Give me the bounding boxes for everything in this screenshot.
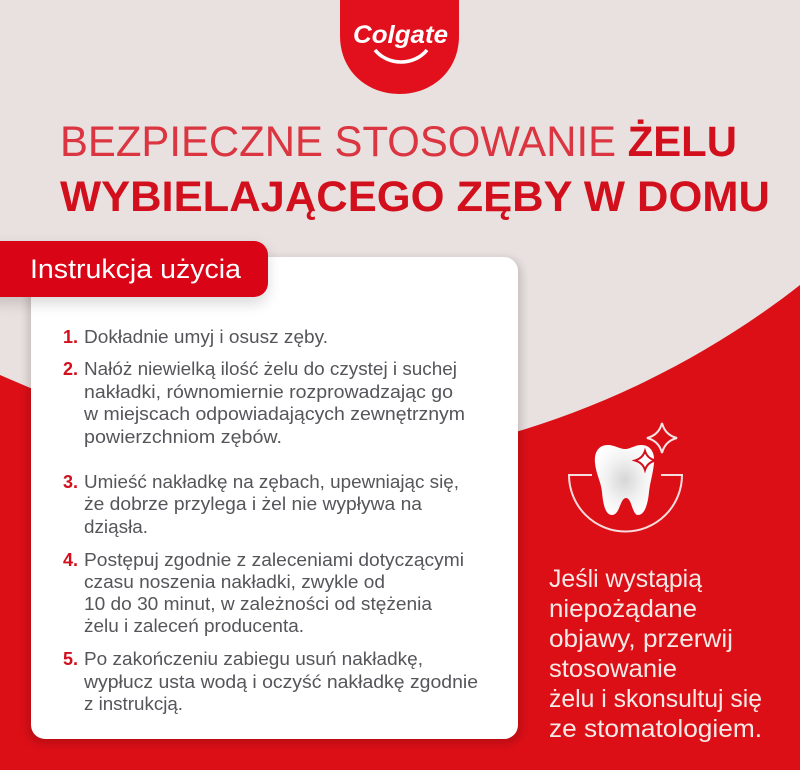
arc under tooth [569,475,682,532]
step 3: 3. [63,472,78,492]
text block: warning: Jeśli wystąpią [549,565,702,593]
step 5: wypłucz usta wodą i oczyść nakładkę zgodnie [83,672,478,692]
step 4: żelu i zaleceń producenta. [84,616,304,636]
tooth [595,445,654,515]
step 1: 1. [63,327,78,347]
logo: Colgate shield: Colgate [353,21,448,49]
step 5 [63,649,478,714]
step 3: że dobrze przylega i żel nie wypływa na [84,494,423,514]
step 1: Dokładnie umyj i osusz zęby. [84,327,328,347]
logo: Colgate shield [340,0,459,94]
step 3: Umieść nakładkę na zębach, upewniając się, [84,472,459,492]
tab: Instrukcja użycia [0,241,268,297]
step 2: Nałóż niewielką ilość żelu do czystej i suchej [84,359,457,379]
step 3 [63,472,459,537]
tab shadow [0,246,268,304]
text block: warning: ze stomatologiem. [549,715,762,743]
step 5: z instrukcją. [84,694,183,714]
title [60,118,770,221]
step 4: 10 do 30 minut, w zależności od stężenia [84,594,433,614]
step 2: 2. [63,359,78,379]
tab: Instrukcja użycia: Instrukcja użycia [30,254,242,284]
step 2: powierzchniom zębów. [84,427,282,447]
step 4: czasu noszenia nakładki, zwykle od [84,572,385,592]
big sparkle [647,423,677,453]
step 2 [63,359,465,447]
panel: instructions card [31,257,518,739]
small sparkle [635,451,655,470]
text block: warning: żelu i skonsultuj się [549,685,762,713]
card shadow [27,258,522,744]
step 3: dziąsła. [84,517,148,537]
title: WYBIELAJĄCEGO ZĘBY W DOMU [60,173,770,221]
icon: tooth with sparkles [569,423,682,532]
step 4: Postępuj zgodnie z zaleceniami dotyczącymi [84,550,464,570]
title: BEZPIECZNE STOSOWANIE ŻELU [60,118,737,166]
step 5: 5. [63,649,78,669]
step 2: w miejscach odpowiadających zewnętrznym [83,404,465,424]
text block: warning: niepożądane [549,595,697,623]
text block: warning: stosowanie [549,655,677,683]
step 4: 4. [63,550,78,570]
list of steps [63,327,478,714]
step 4 [63,550,464,636]
text block: warning [549,565,762,743]
background: red curved area [0,285,800,770]
step 5: Po zakończeniu zabiegu usuń nakładkę, [84,649,423,669]
step 2: nakładki, równomiernie rozprowadzając go [84,382,453,402]
text block: warning: objawy, przerwij [549,625,733,653]
